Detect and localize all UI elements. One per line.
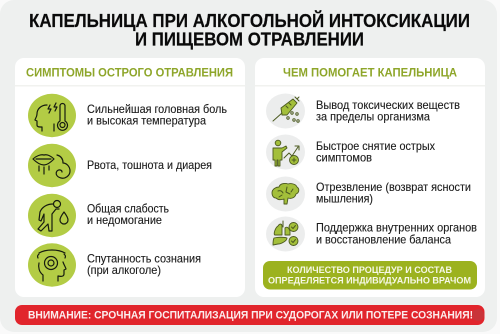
warning banner bbox=[15, 305, 484, 325]
icon: weakness bbox=[28, 194, 76, 237]
text: weakness: Общая слабость bbox=[87, 203, 169, 216]
text: sobering bbox=[316, 181, 471, 206]
icon: vomiting bbox=[28, 144, 76, 187]
text: headache bbox=[87, 103, 227, 128]
callout: doctor note: КОЛИЧЕСТВО ПРОЦЕДУР И СОСТАВ bbox=[287, 265, 452, 276]
title bbox=[29, 10, 470, 50]
icon: lungs and liver bbox=[266, 216, 305, 252]
heading: symptoms: СИМПТОМЫ ОСТРОГО ОТРАВЛЕНИЯ bbox=[26, 66, 233, 80]
text: toxin removal: за пределы организма bbox=[316, 111, 431, 124]
text: confusion: (при алкоголе) bbox=[87, 264, 161, 277]
text: relief of symptoms: Быстрое снятие острых bbox=[316, 140, 435, 153]
panel: how the drip helps bbox=[255, 58, 485, 297]
text: relief of symptoms: симптомов bbox=[316, 152, 372, 164]
text: confusion bbox=[87, 253, 201, 277]
icon: confusion bbox=[28, 243, 76, 287]
text: weakness bbox=[87, 203, 169, 227]
text: weakness: и недомогание bbox=[87, 214, 162, 227]
text: organ support: и восстановление баланса bbox=[316, 233, 452, 246]
warning banner: ВНИМАНИЕ: СРОЧНАЯ ГОСПИТАЛИЗАЦИЯ ПРИ СУДОРОГАХ ИЛИ ПОТЕРЕ СОЗНАНИЯ! bbox=[28, 310, 473, 322]
icon: person and growth arrow bbox=[266, 134, 305, 170]
text: confusion: Спутанность сознания bbox=[87, 253, 201, 266]
text: headache: Сильнейшая головная боль bbox=[87, 103, 227, 116]
panel: symptoms bbox=[15, 58, 245, 297]
heading: how it helps: ЧЕМ ПОМОГАЕТ КАПЕЛЬНИЦА bbox=[283, 66, 457, 80]
text: toxin removal bbox=[316, 99, 460, 124]
text: sobering: Отрезвление (возврат ясности bbox=[316, 181, 471, 194]
text: headache: и высокая температура bbox=[87, 114, 207, 128]
text: sobering: мышления) bbox=[316, 193, 373, 206]
text: vomiting: Рвота, тошнота и диарея bbox=[87, 159, 212, 172]
text: organ support: Поддержка внутренних органов bbox=[316, 222, 477, 235]
title: И ПИЩЕВОМ ОТРАВЛЕНИИ bbox=[135, 30, 364, 50]
title: КАПЕЛЬНИЦА ПРИ АЛКОГОЛЬНОЙ ИНТОКСИКАЦИИ bbox=[29, 10, 470, 31]
text: relief of symptoms bbox=[316, 140, 435, 164]
text: toxin removal: Вывод токсических веществ bbox=[316, 99, 460, 112]
icon: brain bbox=[266, 176, 305, 212]
icon: headache and thermometer bbox=[28, 94, 76, 137]
callout: doctor note bbox=[263, 261, 477, 290]
text: organ support bbox=[316, 222, 477, 246]
callout: doctor note: ОПРЕДЕЛЯЕТСЯ ИНДИВИДУАЛЬНО ВРАЧОМ bbox=[268, 276, 471, 286]
icon: syringe bbox=[266, 94, 305, 128]
